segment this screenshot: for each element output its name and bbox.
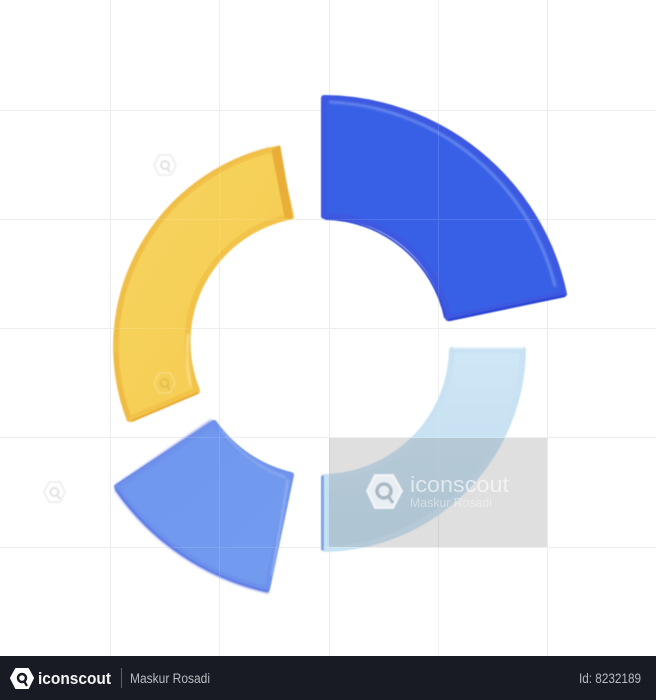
watermark logo: [367, 475, 402, 508]
watermark text: iconscout: [410, 472, 509, 497]
footer author: Maskur Rosadi: [130, 671, 210, 686]
footer bar: [0, 656, 656, 700]
chart segment: yellow: [116, 147, 291, 421]
small watermark bottom left: [44, 482, 65, 502]
chart segment: periwinkle blue: [115, 420, 291, 592]
chart segment: pale blue: [322, 348, 523, 549]
chart segment: royal blue: [324, 98, 564, 320]
small watermark on yellow: [154, 373, 175, 393]
small watermark top left: [154, 155, 176, 175]
footer brand: iconscout: [38, 669, 111, 688]
watermark author: Maskur Rosadi: [410, 496, 492, 510]
footer divider: [121, 668, 122, 688]
footer logo: [11, 669, 33, 688]
footer id: Id: 8232189: [579, 671, 641, 686]
watermark panel: [329, 438, 547, 547]
